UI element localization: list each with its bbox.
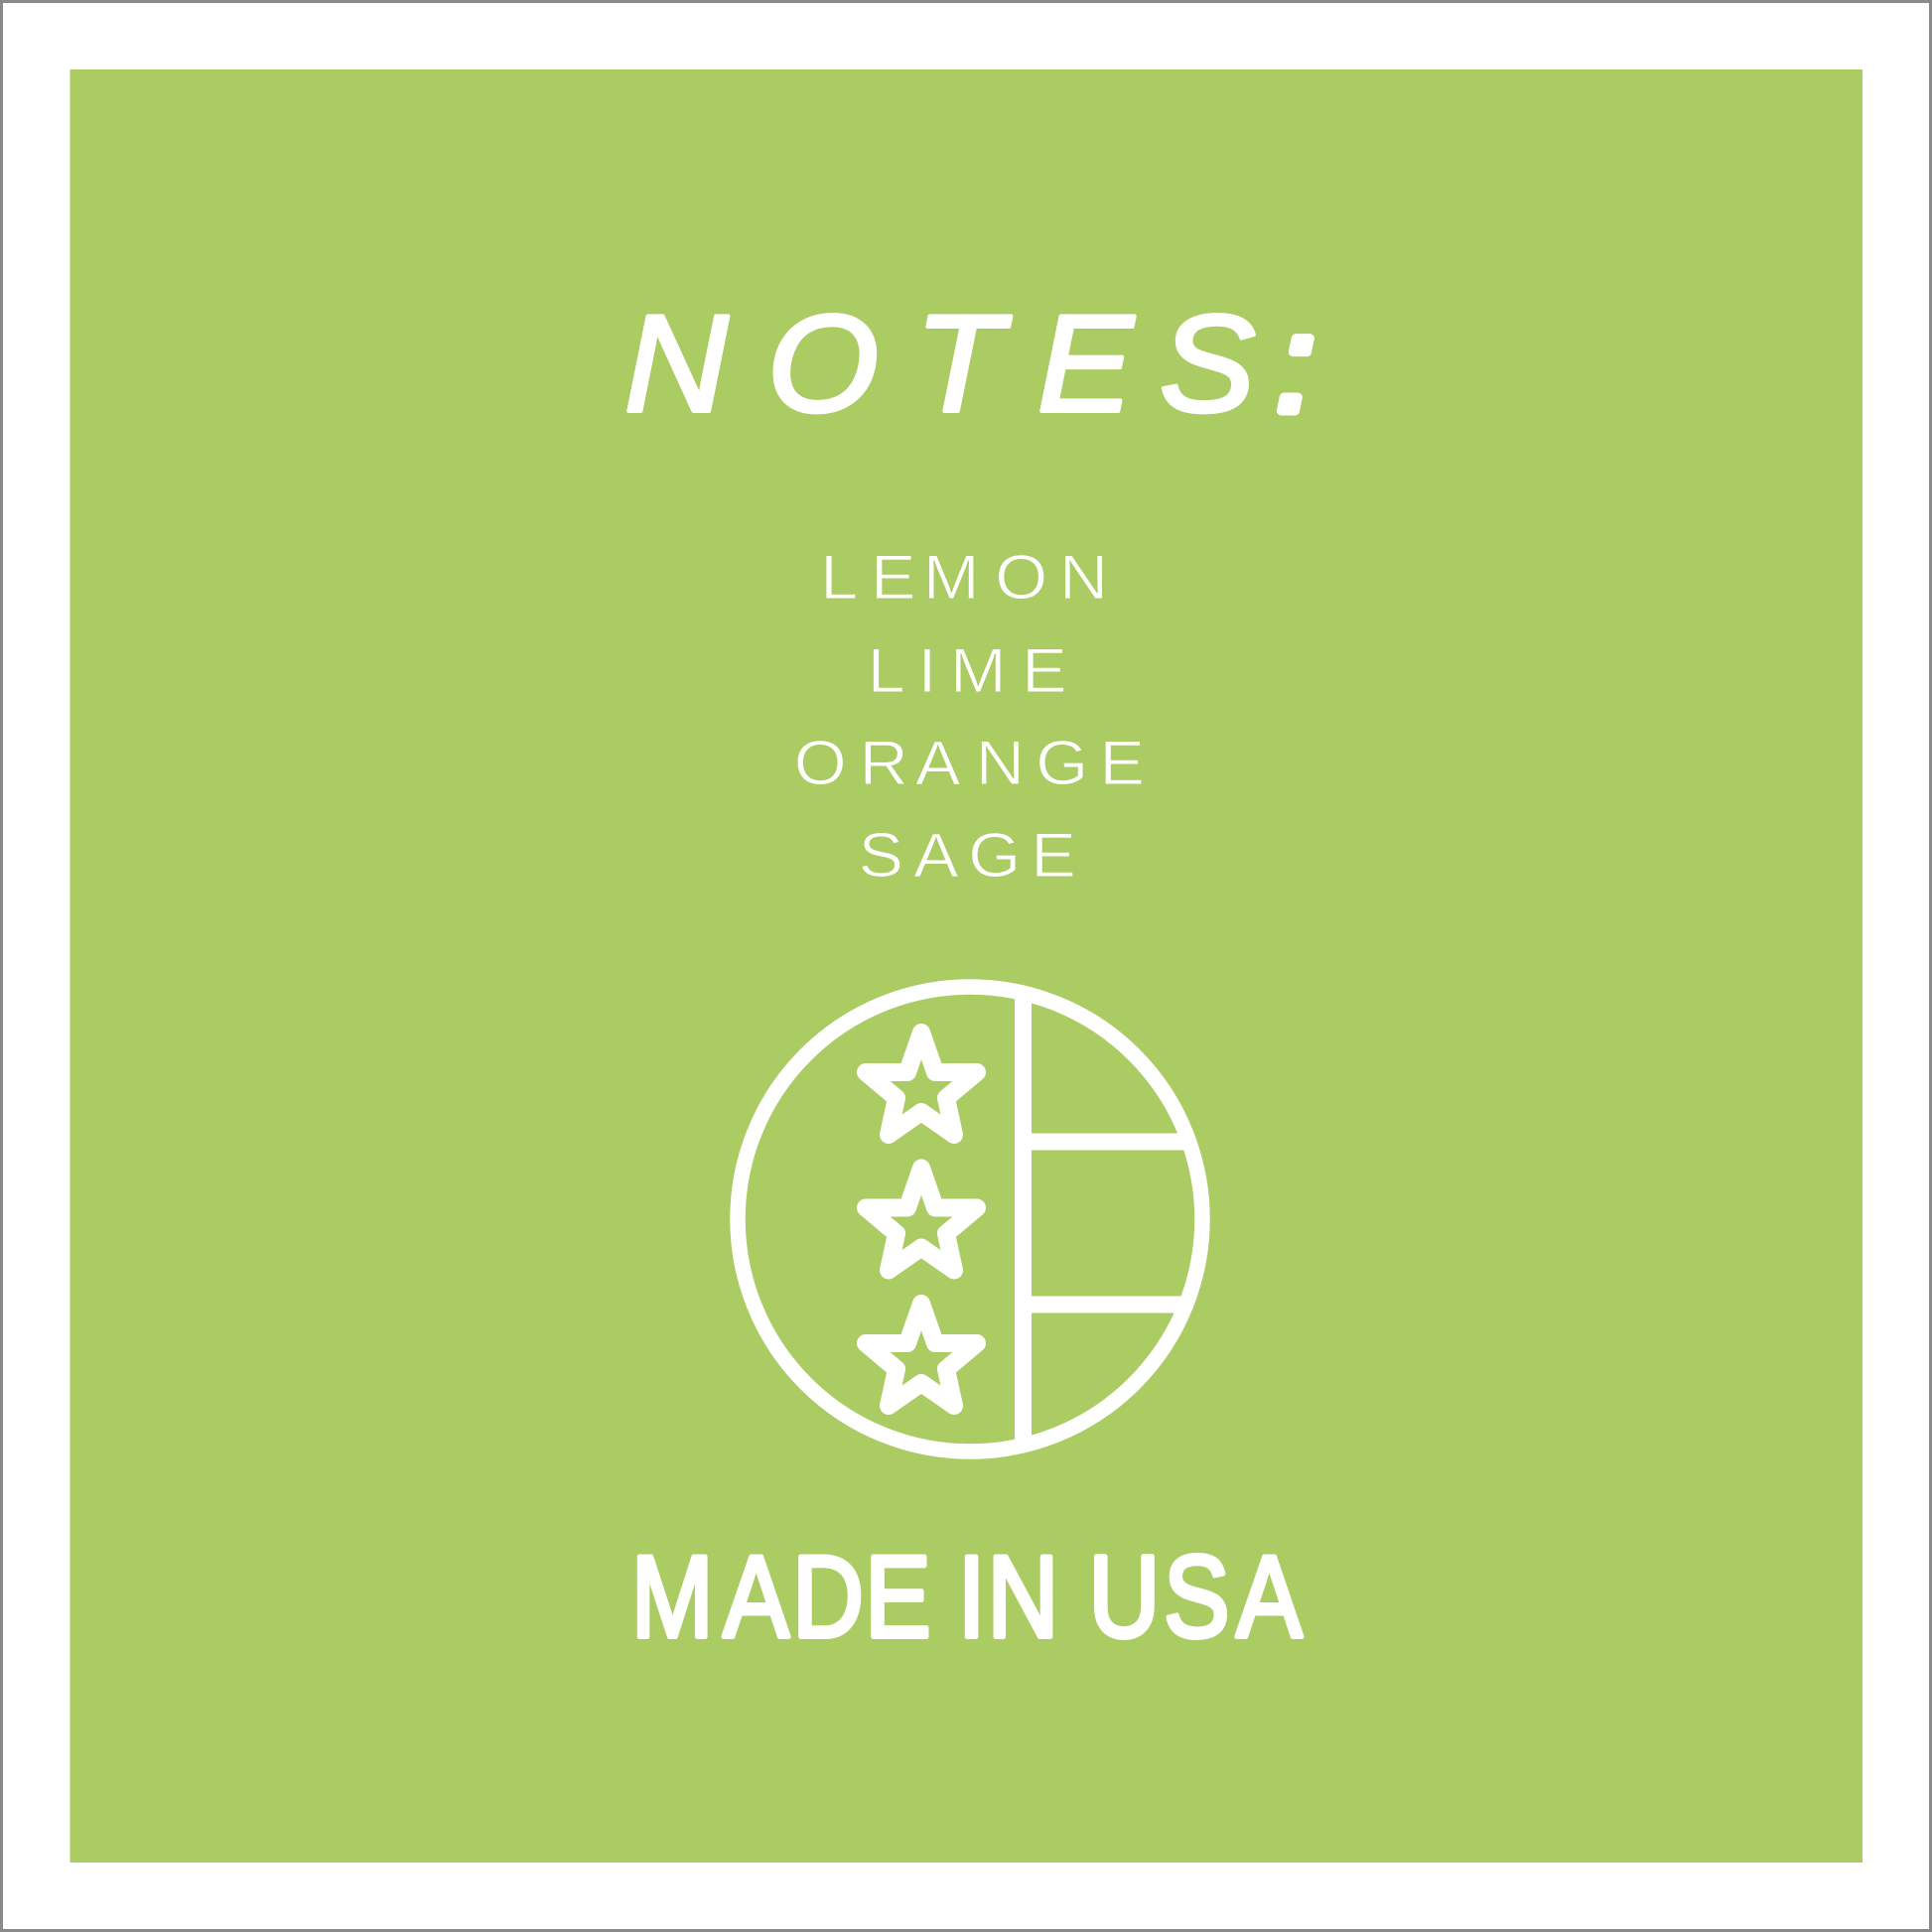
heading: notes: NOTES [624, 288, 1255, 441]
star: bottom [866, 1304, 977, 1406]
heading: notes: : [1276, 288, 1315, 441]
upper stripe [1023, 1134, 1187, 1150]
text block: scent notes list [794, 542, 1145, 890]
note: sage: SAGE [859, 820, 1076, 890]
lower stripe [1023, 1297, 1187, 1312]
note: lemon: LEMON [820, 542, 1108, 612]
star: middle [866, 1168, 977, 1271]
note: lime: LIME [868, 635, 1067, 705]
icon: made in USA globe with stars and stripes [738, 987, 1202, 1451]
note: orange: ORANGE [794, 728, 1145, 797]
globe outline [738, 987, 1202, 1451]
vertical divider [1015, 991, 1032, 1448]
star: top [866, 1033, 977, 1135]
label: made in usa: MADE IN USA [631, 1533, 1303, 1662]
